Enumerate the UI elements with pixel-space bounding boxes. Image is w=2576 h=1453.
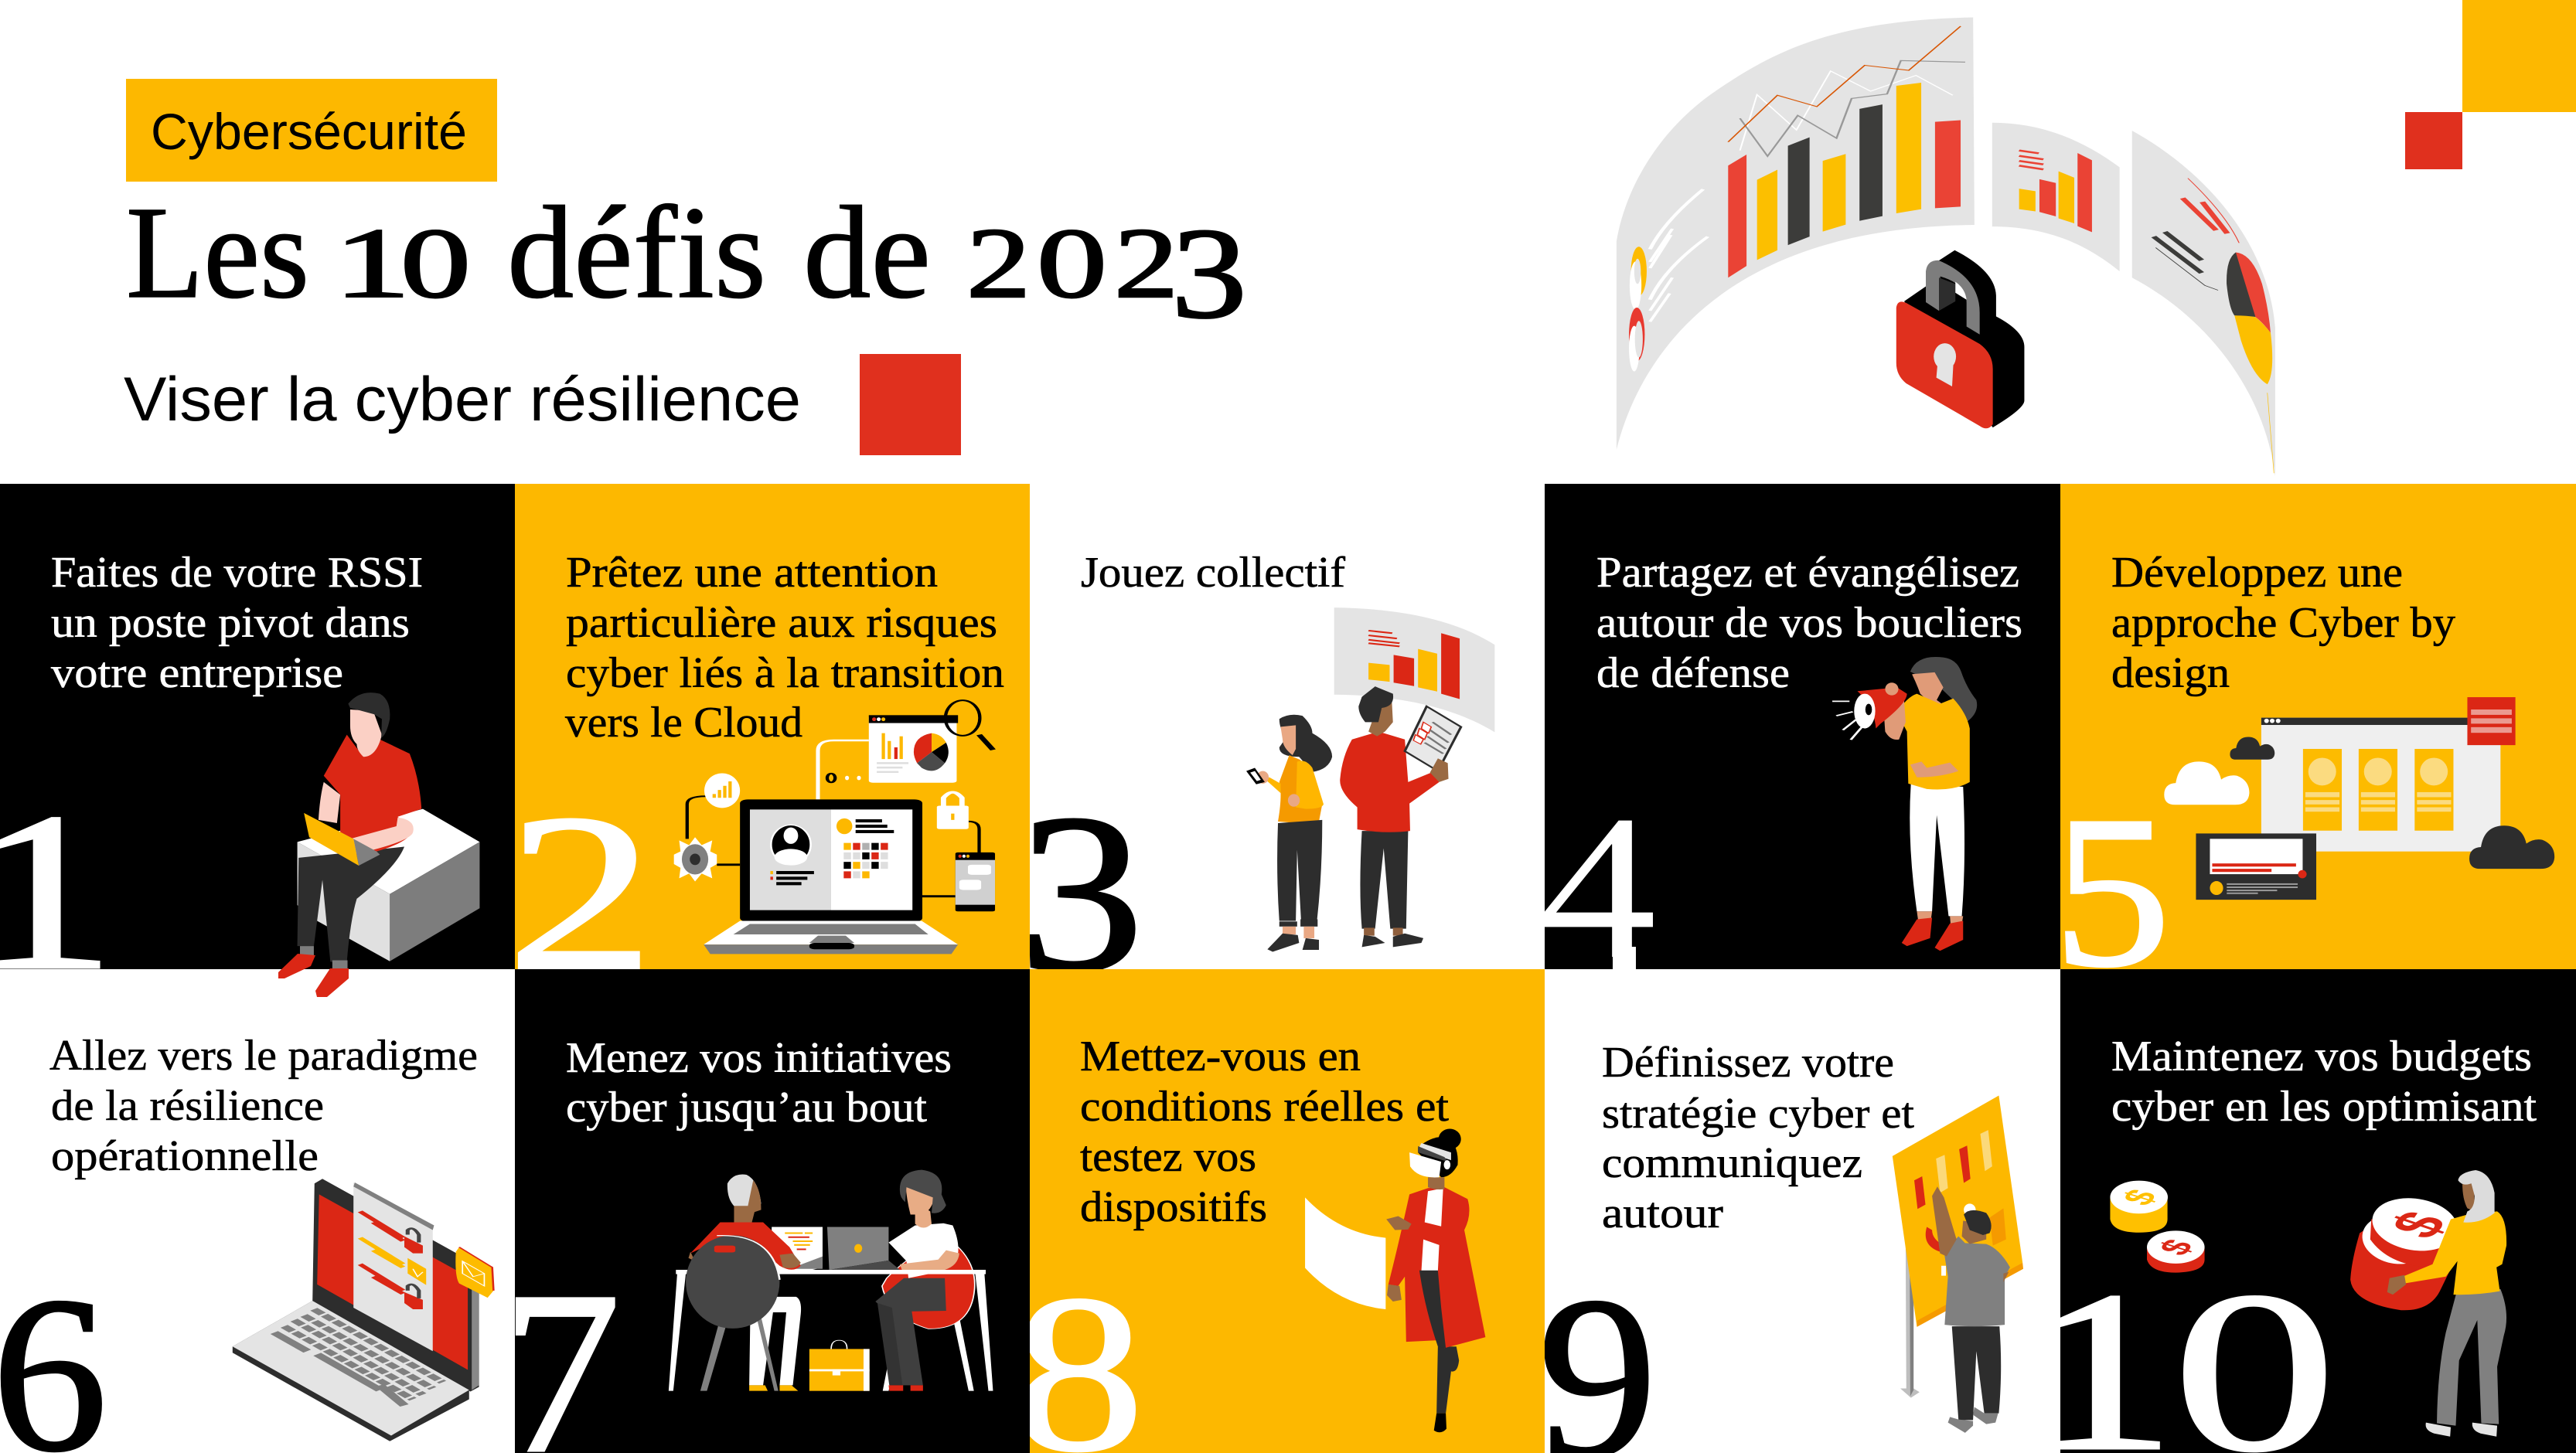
text: challenge 1: un poste pivot dans	[51, 599, 410, 647]
text: challenge 2: vers le Cloud	[565, 699, 802, 747]
illustration: coins and woman with stack of coins	[2110, 1170, 2506, 1437]
text: challenge 6: opérationnelle	[51, 1132, 319, 1180]
text: challenge 1: votre entreprise	[51, 649, 343, 697]
icon: red coin: $	[2151, 1235, 2203, 1260]
text: challenge 1: Faites de votre RSSI	[51, 549, 423, 597]
text: challenge 3: Jouez collectif	[1081, 549, 1345, 597]
text: challenge 8: Mettez-vous en	[1080, 1033, 1361, 1080]
icon: padlock	[1896, 250, 2024, 428]
text: challenge 8	[1080, 1033, 1449, 1231]
title: 2	[966, 208, 1031, 319]
text: challenge 9: communiquez	[1602, 1139, 1862, 1187]
text: challenge 5	[2111, 549, 2455, 697]
title	[126, 179, 1247, 345]
subtitle: Viser la cyber résilience	[124, 365, 801, 434]
title: défis	[507, 179, 766, 325]
icon: big coin stack	[2350, 1192, 2462, 1310]
tile background	[0, 969, 515, 1453]
tile background	[1030, 484, 1545, 969]
panel 6	[0, 1039, 495, 1453]
number 3: 3	[1018, 767, 1144, 1018]
text: challenge 9: autour	[1602, 1189, 1723, 1237]
tag: Cybersécurité: Cybersécurité	[151, 103, 467, 160]
tile background	[1030, 969, 1545, 1453]
panel 10	[2027, 969, 2576, 1453]
panel 1	[0, 484, 515, 1017]
illustration: two people looking at a dashboard	[1246, 607, 1494, 951]
text: challenge 4: de défense	[1596, 649, 1790, 697]
text: challenge 2: particulière aux risques	[566, 599, 997, 647]
tile background	[0, 484, 515, 969]
tile background	[515, 484, 1030, 969]
panel 3	[1030, 556, 1495, 969]
illustration: man at a planning board	[1893, 1096, 2023, 1433]
illustration: web design window and clouds	[2164, 697, 2554, 900]
icon: yellow coin: $	[2114, 1185, 2166, 1210]
text: challenge 10: cyber en les optimisant	[2111, 1083, 2537, 1131]
text: challenge 2: cyber liés à la transition	[566, 649, 1004, 697]
illustration: woman with megaphone	[1832, 657, 1977, 951]
panel 4	[1538, 484, 2060, 1002]
number 4: 4	[1538, 773, 1657, 1002]
panel 7	[501, 969, 1030, 1453]
text: challenge 5: approche Cyber by	[2111, 599, 2455, 647]
panel: middle curved chart	[1992, 123, 2120, 271]
illustration: woman with VR headset and paper	[1305, 1129, 1485, 1432]
icon: big coin stack: $	[2377, 1204, 2462, 1245]
number 5: 5	[2053, 771, 2171, 1012]
title: de	[803, 179, 931, 325]
tile background	[1545, 969, 2060, 1453]
icon: yellow coin	[2110, 1181, 2168, 1233]
title: Les	[126, 179, 309, 325]
text: challenge 2: Prêtez une attention	[566, 549, 938, 597]
number 10	[2060, 1295, 2326, 1453]
tile background	[2060, 969, 2576, 1453]
panel: left curved dashboard	[1617, 17, 1975, 450]
text: challenge 4: autour de vos boucliers	[1596, 599, 2022, 647]
panel 2	[515, 484, 1030, 969]
tile background	[1545, 484, 2060, 969]
text: challenge 8: conditions réelles et	[1080, 1083, 1449, 1131]
illustration: laptop with alerts	[233, 1179, 493, 1441]
text: challenge 4	[1596, 549, 2022, 697]
text: challenge 6: de la résilience	[51, 1082, 324, 1130]
illustration: laptop with connected cloud services	[674, 700, 995, 954]
panel 9	[1545, 1046, 2023, 1453]
title: 0	[1037, 208, 1107, 319]
text: challenge 6: Allez vers le paradigme	[49, 1032, 478, 1080]
text: challenge 2	[565, 549, 1004, 747]
icon: red coin	[2147, 1230, 2205, 1273]
panel: right curved pie chart	[2132, 131, 2275, 476]
text: challenge 7	[566, 1034, 952, 1131]
text: challenge 8: testez vos	[1080, 1133, 1256, 1181]
tag: Cybersécurité	[126, 79, 497, 182]
text: challenge 9	[1602, 1039, 1914, 1237]
text: challenge 4: Partagez et évangélisez	[1596, 549, 2019, 597]
text: challenge 6	[49, 1032, 478, 1180]
title: 2	[1114, 208, 1178, 319]
text: challenge 10	[2111, 1033, 2537, 1131]
text: challenge 7: cyber jusqu’au bout	[566, 1084, 927, 1131]
title: 1	[333, 207, 411, 318]
text: challenge 9: stratégie cyber et	[1602, 1090, 1914, 1138]
title: 3	[1171, 202, 1247, 345]
person: woman	[2387, 1170, 2506, 1437]
text: challenge 9: Définissez votre	[1602, 1039, 1894, 1087]
text: challenge 8: dispositifs	[1080, 1183, 1267, 1231]
text: challenge 10: Maintenez vos budgets	[2111, 1033, 2532, 1080]
tile background	[2060, 484, 2576, 969]
illustration: person with laptop sitting on a cube	[298, 692, 479, 969]
red square accent	[860, 354, 961, 455]
text: challenge 5: design	[2111, 649, 2230, 697]
corner squares	[2405, 0, 2576, 169]
text: challenge 1	[51, 549, 423, 697]
text: challenge 7: Menez vos initiatives	[566, 1034, 952, 1082]
number 4	[1545, 821, 1653, 969]
illustration: two people at a desk	[669, 1170, 993, 1391]
tile background	[515, 969, 1030, 1453]
title: 0	[400, 208, 471, 319]
panel 8	[1013, 969, 1545, 1453]
header illustration: dashboard panels and padlock	[1617, 17, 2275, 476]
text: challenge 5: Développez une	[2111, 549, 2403, 597]
panel 5	[2053, 484, 2576, 1012]
icon: red shoes	[278, 954, 349, 997]
number 2: 2	[506, 767, 655, 1019]
